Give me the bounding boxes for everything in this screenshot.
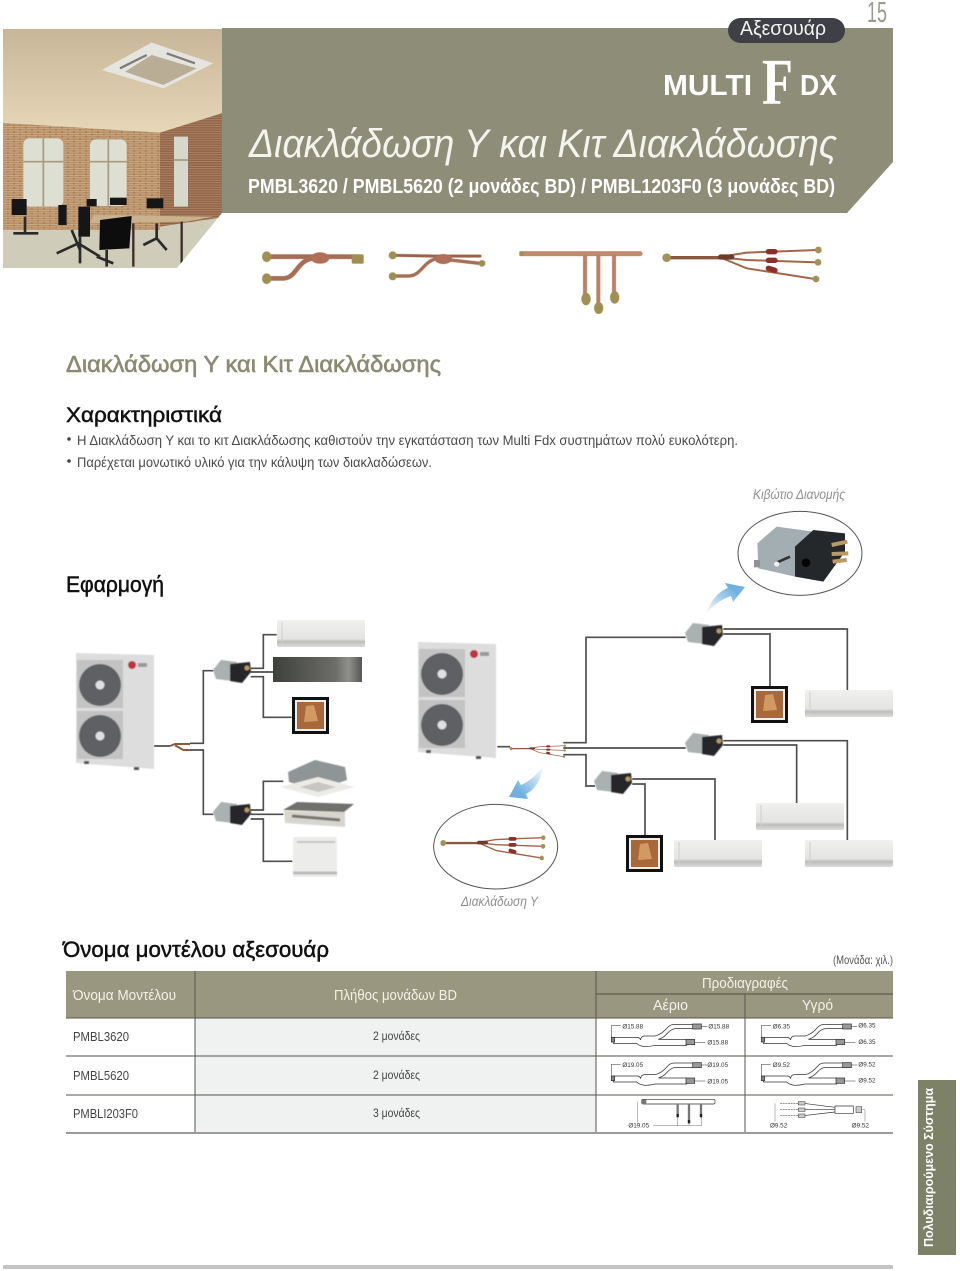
table header row: Αέριο xyxy=(653,998,688,1014)
drawing: gas 19.05: Ø19.05 xyxy=(707,1078,729,1085)
table header row: Προδιαγραφές xyxy=(702,976,788,992)
banner subtitle: model numbers: PMBL3620 / PMBL5620 (2 μονάδες BD) / PMBL1203F0 (3 μονάδες BD) xyxy=(248,176,835,198)
drawing: liquid 9.52 xyxy=(761,1061,876,1085)
side tab: multi split system: Πολυδιαιρούμενο Σύστημα xyxy=(921,1088,936,1247)
table row: PMBL3620: 2 μονάδες xyxy=(373,1031,420,1043)
callout: Y branch xyxy=(434,804,558,889)
accessory table xyxy=(66,971,893,1133)
drawing: liquid 6.35: Ø6.35 xyxy=(858,1039,876,1046)
gallery indoor unit xyxy=(292,697,329,734)
table grid xyxy=(66,971,893,1133)
arrow: to Y branch xyxy=(509,765,543,799)
table header row xyxy=(66,971,893,1018)
distribution box upper xyxy=(213,660,251,683)
drawing: gas 19.05: Ø19.05 xyxy=(707,1062,729,1069)
wall unit 1 xyxy=(805,690,893,717)
table row: PMBL1203F0: PMBLI203F0 xyxy=(73,1106,138,1121)
drawing: gas 15.88: Ø15.88 xyxy=(622,1023,644,1030)
drawing: gas 15.88: Ø15.88 xyxy=(708,1023,730,1030)
wall unit 2 xyxy=(756,803,844,830)
pipe kit 4: three-way xyxy=(662,247,822,282)
piping lines xyxy=(497,629,847,840)
category pill xyxy=(728,18,845,43)
drawing: liquid 9.52: Ø9.52 xyxy=(773,1062,790,1069)
gallery unit upper xyxy=(751,686,788,723)
section heading: Διακλάδωση Υ και Κιτ Διακλάδωσης xyxy=(66,351,441,377)
drawing: gas header 19.05 xyxy=(627,1099,715,1130)
duct unit xyxy=(283,802,354,827)
ceiling cassette unit xyxy=(280,760,355,797)
specification drawings xyxy=(611,1023,876,1130)
side tab: multi split system xyxy=(918,1080,956,1255)
wall unit 3 xyxy=(674,840,762,867)
drawing: gas 15.88: Ø15.88 xyxy=(707,1040,729,1047)
drawing: gas 15.88 xyxy=(611,1023,730,1047)
drawing: liquid 6.35: Ø6.35 xyxy=(858,1023,876,1030)
category pill: Αξεσουάρ xyxy=(740,18,826,40)
callout label: distribution box: Κιβώτιο Διανομής xyxy=(753,487,845,502)
logo: Multi F DX: DX xyxy=(800,70,838,102)
banner title: Διακλάδωση Υ και Κιτ Διακλάδωσης xyxy=(248,122,838,166)
distribution box 1 xyxy=(685,623,723,646)
logo: Multi F DX: F xyxy=(762,46,793,119)
features list xyxy=(67,433,738,470)
drawing: liquid fan 9.52: Ø9.52 xyxy=(770,1123,788,1130)
header photo: office with ceiling cassette xyxy=(0,27,227,270)
pipe kit 2 xyxy=(389,251,485,280)
table heading: Όνομα μοντέλου αξεσουάρ xyxy=(62,937,329,962)
table header row: Πλήθος μονάδων BD xyxy=(334,988,457,1004)
drawing: liquid 9.52: Ø9.52 xyxy=(858,1061,876,1068)
product photos: branch pipes xyxy=(262,247,822,314)
arrow: to distribution box xyxy=(706,583,745,614)
table row: PMBL5620 xyxy=(73,1068,420,1083)
table row: PMBL3620 xyxy=(73,1029,420,1044)
header banner xyxy=(222,28,893,213)
distribution box lower xyxy=(213,802,251,825)
piping lines xyxy=(154,635,292,861)
drawing: liquid 6.35: Ø6.35 xyxy=(773,1023,790,1030)
pipe kit 1 xyxy=(262,251,364,284)
features list: Η Διακλάδωση Υ και το κιτ Διακλάδωσης καθιστούν την εγκατάσταση των Multi Fdx συστημάτων πολύ ευκολότερη. xyxy=(77,433,738,448)
piping diagram: left system xyxy=(76,620,365,877)
three-way branch xyxy=(510,744,566,758)
features heading: Χαρακτηριστικά xyxy=(66,404,222,427)
table row: PMBL3620: PMBL3620 xyxy=(73,1029,129,1044)
distribution box 2 xyxy=(685,733,723,756)
logo: Multi F DX: MULTI xyxy=(663,70,752,102)
features list: Παρέχεται μονωτικό υλικό για την κάλυψη των διακλαδώσεων. xyxy=(77,455,432,470)
table row: PMBL1203F0: 3 μονάδες xyxy=(373,1108,420,1120)
outdoor unit xyxy=(418,642,496,759)
table header row: Υγρό xyxy=(802,998,833,1014)
callout: distribution box xyxy=(738,511,862,595)
outdoor unit xyxy=(76,653,154,770)
logo: Multi F DX xyxy=(663,46,838,119)
drawing: gas 19.05: Ø19.05 xyxy=(622,1062,644,1069)
table header row: Όνομα Μοντέλου xyxy=(72,988,176,1004)
table row: PMBL5620: 2 μονάδες xyxy=(373,1070,420,1082)
application heading: Εφαρμογή xyxy=(66,572,164,597)
callout label: Y branch: Διακλάδωση Υ xyxy=(460,894,539,909)
distribution box 3 xyxy=(594,771,632,794)
pipe kit 3: header xyxy=(519,251,640,314)
wall unit 4 xyxy=(805,840,893,867)
bottom rule xyxy=(3,1265,893,1269)
table body shading xyxy=(195,1018,596,1133)
drawing: liquid fan 9.52 xyxy=(770,1102,869,1130)
drawing: liquid 6.35 xyxy=(761,1023,876,1047)
drawing: liquid fan 9.52: Ø9.52 xyxy=(852,1123,869,1130)
piping diagram: right system xyxy=(418,623,893,872)
table row: PMBL5620: PMBL5620 xyxy=(73,1068,129,1083)
wall indoor unit xyxy=(277,620,365,647)
drawing: gas header 19.05: Ø19.05 xyxy=(628,1123,650,1130)
drawing: gas 19.05 xyxy=(611,1062,729,1085)
drawing: liquid 9.52: Ø9.52 xyxy=(858,1078,876,1085)
table row: PMBL1203F0 xyxy=(73,1106,420,1121)
dark wall indoor unit xyxy=(273,657,362,682)
unit note: (Μονάδα: χιλ.) xyxy=(833,953,893,967)
console unit xyxy=(293,837,337,877)
gallery unit lower xyxy=(626,835,663,872)
